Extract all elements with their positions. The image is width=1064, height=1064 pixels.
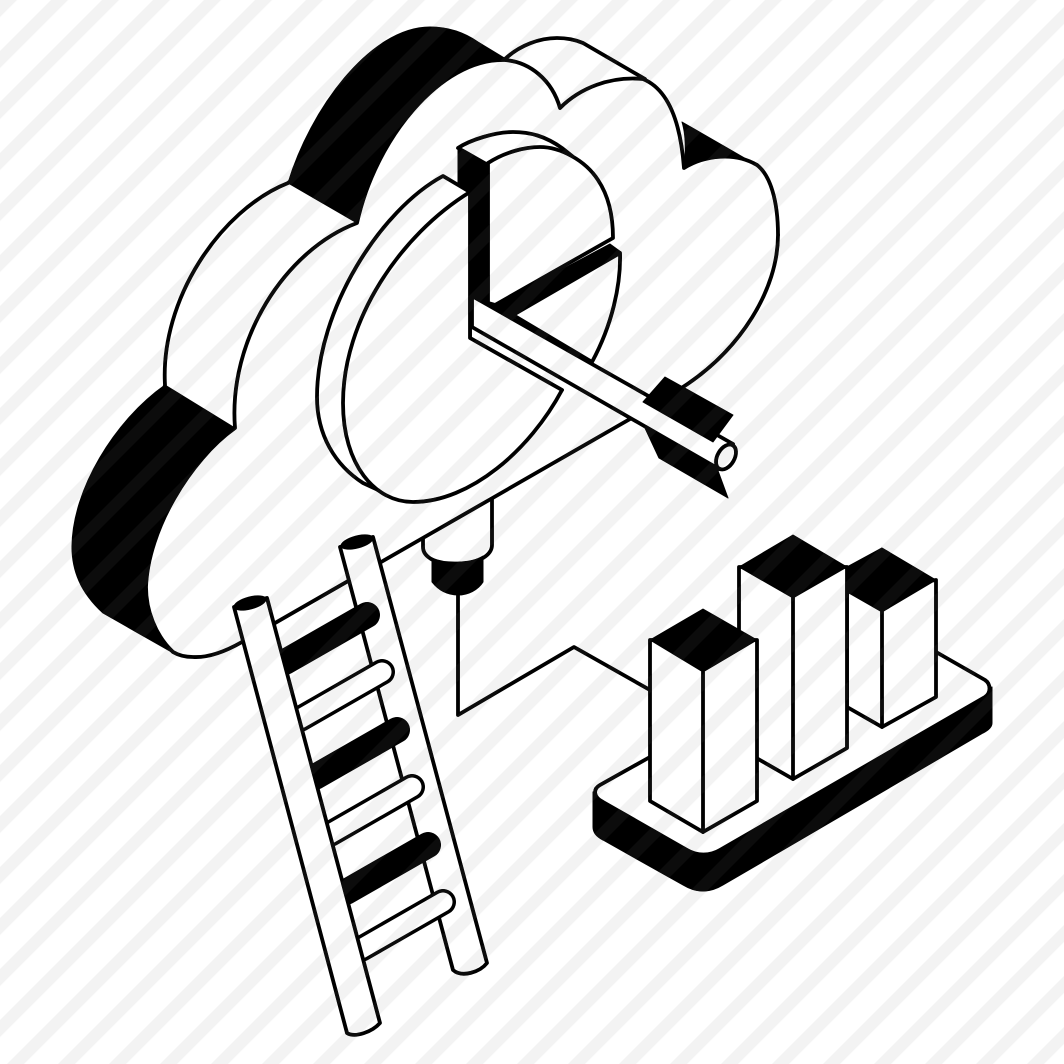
upper pie slice rim: [458, 132, 572, 165]
white rung 3: [361, 902, 443, 949]
large pie slice rim: [317, 176, 562, 500]
cloud: [72, 27, 778, 657]
cloud top black side: [288, 27, 511, 223]
bar chart platform: [593, 652, 992, 891]
connector wire: [458, 594, 650, 715]
bar 1 (front): [650, 609, 757, 832]
cloud right black side: [682, 122, 748, 169]
platform black thickness: [593, 687, 992, 891]
cloud back edge: [110, 38, 778, 645]
black rung 2: [315, 730, 397, 777]
large pie slice face: [343, 192, 562, 502]
ladder left rail: [232, 592, 380, 1035]
white rung 1: [300, 672, 382, 719]
pie black slab: [488, 244, 621, 320]
black rung 1: [285, 615, 367, 662]
arrow tail end: [712, 441, 740, 473]
arrow shaft: [472, 296, 733, 469]
ladder: [232, 531, 487, 1035]
arrow lower black fletching: [645, 428, 728, 498]
white rung 2: [330, 787, 412, 834]
pie chart: [317, 132, 621, 502]
ladder right rail: [339, 531, 487, 974]
bar chart: [650, 535, 936, 832]
ladder rungs: [285, 615, 443, 949]
platform top face: [595, 652, 990, 854]
arrow upper black fletching: [643, 377, 733, 442]
bar 3 (back right): [847, 548, 936, 727]
black rung 3: [346, 845, 428, 892]
third pie slice: [513, 253, 620, 362]
arrow: [472, 296, 740, 498]
cloud front face: [146, 60, 778, 657]
bar 2 (tall middle): [739, 535, 847, 779]
upper pie slice face: [488, 147, 613, 305]
connector pin under cloud: [423, 495, 492, 595]
cloud left black side: [72, 385, 235, 654]
pie black wall: [458, 148, 488, 310]
